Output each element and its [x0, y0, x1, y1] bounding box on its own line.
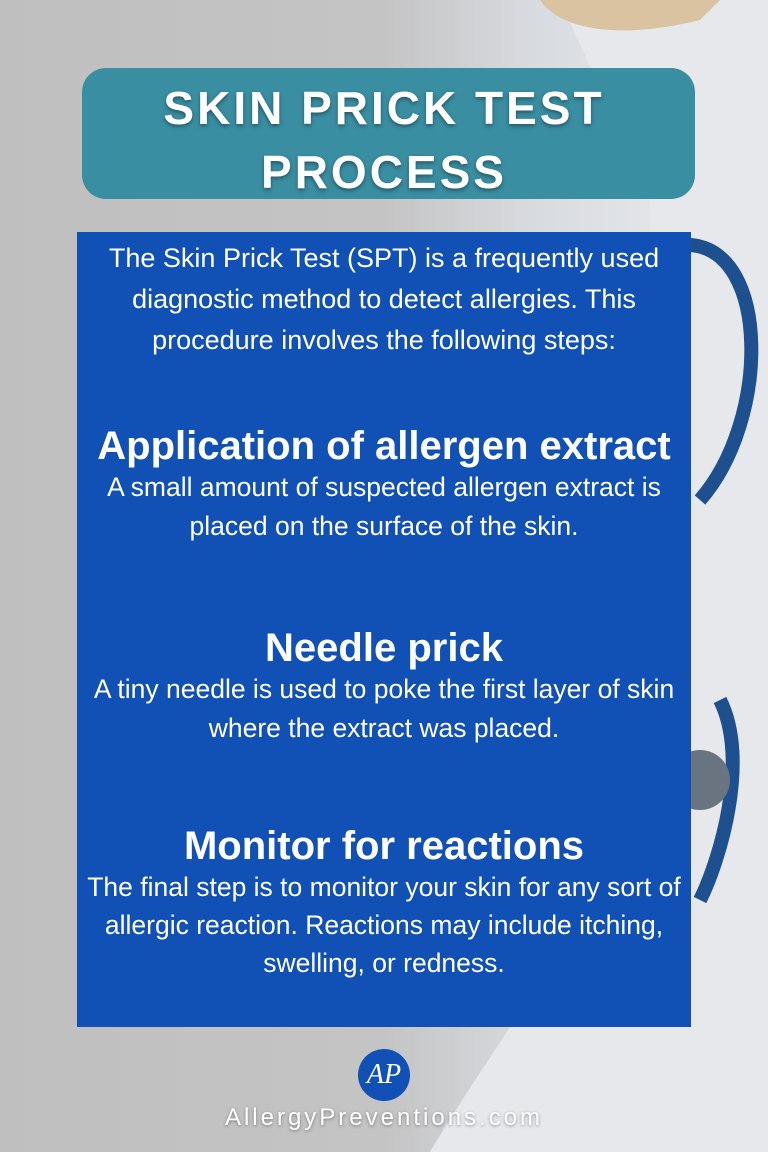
intro text: diagnostic method to detect allergies. This: [132, 284, 636, 314]
logo icon: [358, 1049, 410, 1101]
main panel: [77, 232, 691, 1027]
step 3: allergic reaction. Reactions may include itching,: [105, 910, 663, 940]
step 3: swelling, or redness.: [263, 948, 505, 978]
title: [163, 82, 605, 198]
intro text: procedure involves the following steps:: [152, 325, 616, 355]
intro text: The Skin Prick Test (SPT) is a frequently used: [109, 243, 659, 273]
logo icon: AP: [367, 1059, 401, 1090]
title: SKIN PRICK TEST: [163, 82, 605, 134]
title: PROCESS: [261, 146, 507, 198]
intro text: [109, 243, 659, 355]
step 1: Application of allergen extract: [97, 424, 671, 468]
step 2: A tiny needle is used to poke the first layer of skin: [94, 674, 674, 704]
step 3: Monitor for reactions: [184, 824, 584, 868]
step 2: [94, 626, 674, 743]
step 2: where the extract was placed.: [209, 713, 559, 743]
title banner: [82, 68, 695, 199]
step 1: placed on the surface of the skin.: [190, 511, 578, 541]
step 3: The final step is to monitor your skin for any sort of: [87, 872, 681, 902]
step 1: [97, 424, 671, 541]
step 2: Needle prick: [265, 626, 503, 670]
step 1: A small amount of suspected allergen extract is: [107, 472, 661, 502]
step 3: [87, 824, 681, 978]
website: AllergyPreventions.com: [225, 1104, 543, 1131]
